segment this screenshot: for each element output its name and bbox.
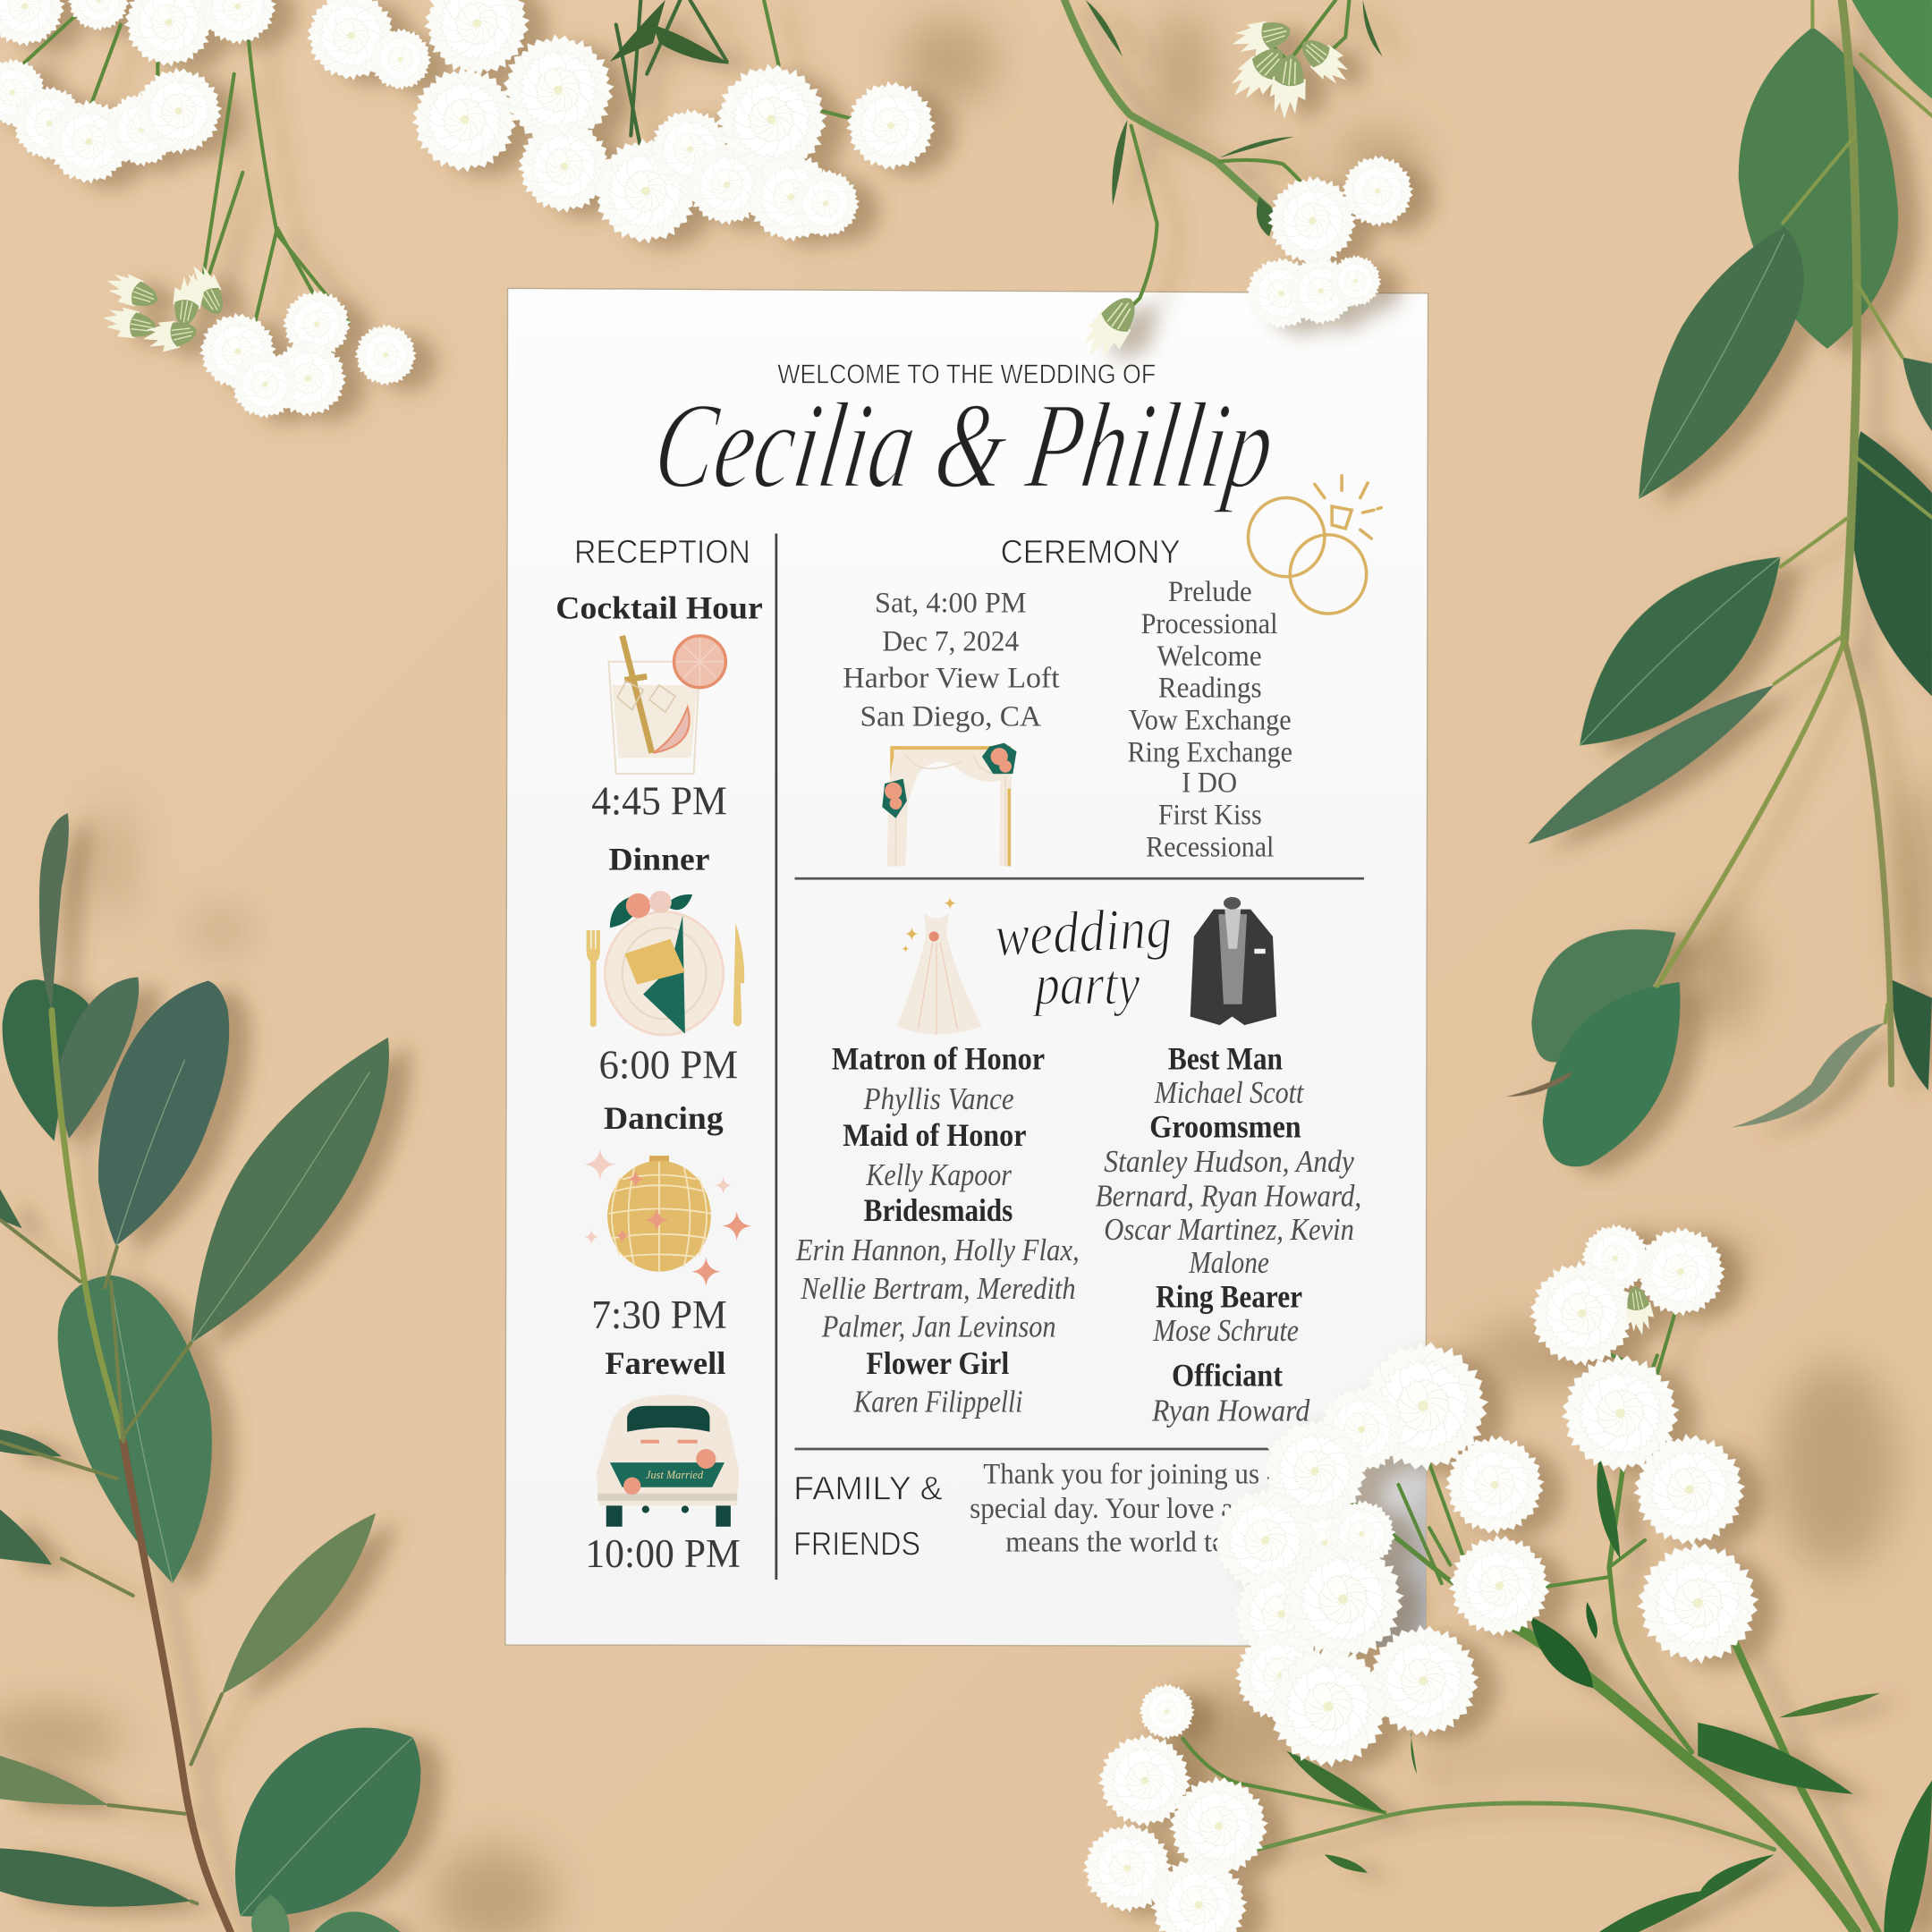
groom side attendants: Oscar Martinez, Kevin bbox=[1104, 1213, 1354, 1247]
groom side attendants: Ring Bearer bbox=[1156, 1279, 1302, 1315]
icon: bridal gown bbox=[897, 897, 982, 1035]
bride side attendants: Bridesmaids bbox=[864, 1192, 1013, 1228]
thank you message: Thank you for joining us on our bbox=[983, 1459, 1338, 1491]
ceremony order of events: Recessional bbox=[1146, 831, 1274, 863]
botanical: flower sprig top right bbox=[1064, 0, 1414, 368]
icon: floral wedding arch bbox=[882, 743, 1016, 866]
ceremony order of events: Readings bbox=[1158, 673, 1262, 705]
bride side attendants: Flower Girl bbox=[866, 1345, 1009, 1381]
bride side attendants bbox=[795, 1041, 1080, 1419]
couple names: Cecilia & Phillip bbox=[647, 377, 1282, 513]
thank you message: special day. Your love and support bbox=[970, 1493, 1352, 1525]
ceremony order of events: Welcome bbox=[1157, 640, 1262, 673]
icon: gold rings with diamond bbox=[1248, 476, 1381, 614]
ceremony details: Harbor View Loft bbox=[843, 663, 1060, 695]
branch flower heads bbox=[1081, 1223, 1760, 1932]
label: dancing: Dancing bbox=[604, 1100, 724, 1136]
right leaves bbox=[1505, 0, 1932, 1166]
heading: reception: RECEPTION bbox=[574, 533, 750, 571]
ceremony order of events: Ring Exchange bbox=[1127, 736, 1292, 768]
time: farewell: 10:00 PM bbox=[585, 1530, 741, 1576]
ceremony details: Dec 7, 2024 bbox=[882, 625, 1019, 657]
botanical: eucalyptus branch left bbox=[0, 813, 420, 1932]
bride side attendants: Nellie Bertram, Meredith bbox=[801, 1272, 1076, 1306]
botanical: white flowers top left bbox=[0, 0, 936, 419]
icon: groom tuxedo bbox=[1191, 897, 1276, 1025]
sprig flower heads bbox=[1075, 14, 1414, 368]
label: farewell: Farewell bbox=[605, 1345, 725, 1381]
label: cocktail hour: Cocktail Hour bbox=[555, 590, 763, 626]
icon: cocktail glass bbox=[609, 636, 725, 774]
icon: getaway car bbox=[597, 1394, 740, 1527]
branch leaves bbox=[1286, 1456, 1932, 1932]
ceremony order of events: Vow Exchange bbox=[1129, 705, 1292, 737]
groom side attendants: Mose Schrute bbox=[1153, 1314, 1299, 1348]
card sheet bbox=[505, 288, 1428, 1646]
thank you message bbox=[970, 1459, 1352, 1558]
icon: disco ball with sparkles bbox=[584, 1148, 751, 1286]
bride side attendants: Kelly Kapoor bbox=[866, 1158, 1012, 1192]
icon: dinner plate setting bbox=[587, 891, 744, 1035]
panel: ceremony bbox=[843, 533, 1292, 866]
heading: family and friends: FAMILY & bbox=[793, 1469, 943, 1506]
ceremony order of events: First Kiss bbox=[1158, 800, 1262, 832]
bride side attendants: Erin Hannon, Holly Flax, bbox=[795, 1233, 1080, 1267]
groom side attendants: Ryan Howard bbox=[1151, 1394, 1310, 1428]
ceremony details: San Diego, CA bbox=[860, 700, 1041, 733]
branch stems bbox=[1182, 1306, 1877, 1932]
groom side attendants: Stanley Hudson, Andy bbox=[1104, 1145, 1355, 1179]
top left stems bbox=[13, 0, 878, 333]
ceremony order of events: I DO bbox=[1182, 767, 1237, 800]
card corner curl bbox=[1293, 1345, 1427, 1646]
botanical: large flower branch bottom right bbox=[1081, 1223, 1932, 1932]
bride side attendants: Maid of Honor bbox=[843, 1117, 1027, 1153]
bride side attendants: Palmer, Jan Levinson bbox=[821, 1310, 1056, 1344]
icon: getaway car: Just Married bbox=[646, 1469, 704, 1481]
ceremony details: Sat, 4:00 PM bbox=[875, 588, 1027, 620]
groom side attendants: Best Man bbox=[1168, 1041, 1283, 1077]
botanical: eucalyptus branch right bbox=[1505, 0, 1932, 1166]
heading: family and friends: FRIENDS bbox=[793, 1524, 920, 1562]
welcome line: WELCOME TO THE WEDDING OF bbox=[777, 360, 1156, 389]
ceremony order of events bbox=[1127, 576, 1292, 863]
heading: family and friends bbox=[793, 1469, 943, 1562]
top left flower heads bbox=[0, 0, 936, 419]
divider: vertical bbox=[775, 533, 777, 1580]
heading: wedding party script: wedding bbox=[993, 894, 1174, 970]
panel: reception timeline bbox=[555, 533, 763, 1576]
time: dinner: 6:00 PM bbox=[598, 1041, 738, 1087]
heading: wedding party script bbox=[993, 894, 1174, 1018]
ceremony details bbox=[843, 588, 1060, 733]
groom side attendants: Michael Scott bbox=[1154, 1076, 1305, 1110]
ceremony order of events: Processional bbox=[1141, 608, 1278, 640]
groom side attendants: Officiant bbox=[1172, 1358, 1283, 1394]
ceremony order of events: Prelude bbox=[1168, 576, 1252, 608]
time: dancing: 7:30 PM bbox=[591, 1292, 727, 1337]
panel: wedding party bbox=[795, 894, 1361, 1428]
eucalyptus leaves bbox=[0, 813, 420, 1932]
groom side attendants: Malone bbox=[1188, 1246, 1269, 1280]
groom side attendants: Bernard, Ryan Howard, bbox=[1096, 1180, 1361, 1214]
panel: wedding program card bbox=[505, 288, 1428, 1646]
bride side attendants: Karen Filippelli bbox=[853, 1385, 1022, 1419]
bride side attendants: Phyllis Vance bbox=[863, 1082, 1014, 1116]
heading: wedding party script: party bbox=[1032, 953, 1140, 1018]
bride side attendants: Matron of Honor bbox=[832, 1041, 1045, 1077]
panel: family and friends note bbox=[793, 1459, 1352, 1562]
groom side attendants: Groomsmen bbox=[1149, 1108, 1301, 1144]
label: dinner: Dinner bbox=[609, 842, 710, 877]
thank you message: means the world to them! bbox=[1005, 1526, 1301, 1558]
right stems bbox=[1657, 0, 1932, 1084]
heading: ceremony: CEREMONY bbox=[1001, 533, 1181, 571]
time: cocktail hour: 4:45 PM bbox=[591, 778, 727, 824]
eucalyptus stems bbox=[0, 1011, 231, 1932]
sprig stems bbox=[1064, 0, 1383, 323]
title block bbox=[647, 360, 1282, 513]
groom side attendants bbox=[1096, 1041, 1361, 1428]
